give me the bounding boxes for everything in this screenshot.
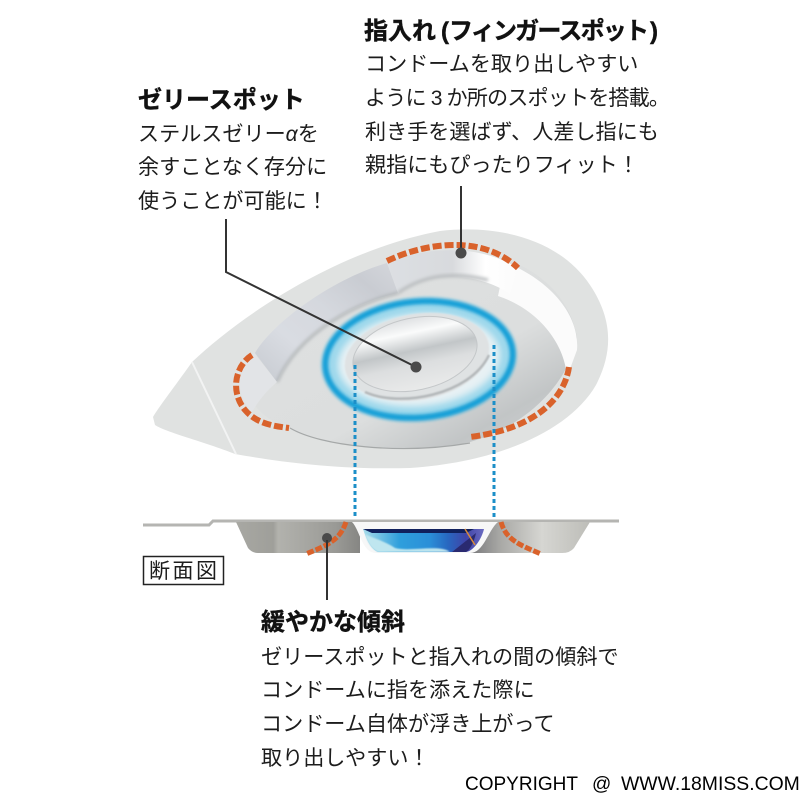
orange dashed: right slope: [501, 522, 541, 554]
leader line: gentle slope: [322, 533, 332, 600]
orange dashed: top finger spot: [387, 245, 518, 268]
text: finger spot description: ように 3 か所のスポットを搭載。: [365, 86, 670, 110]
dotted guide lines: [355, 345, 494, 518]
heading: jelly spot: [138, 86, 328, 213]
jelly cup: [346, 306, 484, 402]
pale lower left: [365, 534, 450, 552]
blue jelly cavity: [363, 529, 484, 552]
text: jelly spot description: 使うことが可能に！: [138, 189, 328, 213]
text: gentle slope description: 取り出しやすい！: [261, 746, 430, 770]
heading: finger spot: 指入れ: [364, 18, 436, 45]
text: jelly spot description: 余すことなく存分に: [138, 155, 327, 179]
heading: finger spot: ): [650, 18, 658, 45]
diagram: cross section: [143, 521, 619, 554]
text: finger spot description: 利き手を選ばず、人差し指にも: [365, 120, 659, 144]
tray body right: [470, 522, 590, 553]
heading: gentle slope: 緩やかな傾斜: [261, 609, 405, 636]
groove right band: [498, 262, 577, 377]
text: gentle slope description: コンドーム自体が浮き上がって: [261, 712, 555, 736]
orange dashed: right finger spot: [470, 367, 569, 437]
top spot lower shadow: [398, 276, 488, 293]
text: gentle slope description: コンドームに指を添えた際に: [261, 678, 535, 702]
tray lip: [143, 521, 619, 525]
groove top finger spot: [387, 250, 518, 294]
groove upper left band: [255, 263, 398, 382]
copyright: WWW.18MISS.COM: [621, 773, 800, 795]
thin bottom edge: [290, 428, 470, 448]
inner platform soft: [322, 295, 516, 423]
platform lower rim: [365, 355, 489, 399]
navy top strip: [363, 529, 474, 533]
text: gentle slope description: [261, 645, 619, 770]
orange reflection: [465, 529, 475, 545]
leader line: jelly spot: [226, 219, 422, 372]
diagram: top view of condom case: [153, 229, 608, 468]
text: gentle slope description: ゼリースポットと指入れの間の傾斜で: [261, 645, 619, 669]
tab crease: [192, 362, 236, 454]
text: finger spot description: 親指にもぴったりフィット！: [365, 153, 639, 177]
text: finger spot description: コンドームを取り出しやすい: [365, 52, 638, 76]
label: cross section: [144, 556, 224, 584]
leader line: finger spot: [456, 186, 466, 258]
copyright: COPYRIGHT: [465, 774, 578, 795]
heading: finger spot: [364, 18, 670, 177]
groove left spot: [240, 353, 277, 412]
label: cross section: 断面図: [149, 560, 217, 583]
text: jelly spot description: ステルスゼリーαを: [138, 122, 319, 146]
heading: gentle slope: [261, 609, 619, 770]
dark right corner: [452, 533, 476, 552]
groove band inner shadow: [277, 293, 398, 382]
floor shading: [247, 262, 577, 449]
center highlight: [352, 522, 498, 553]
blue ring: [320, 294, 518, 425]
heading: finger spot: (: [441, 18, 449, 45]
text: finger spot description: [365, 52, 670, 177]
copyright: @: [592, 774, 611, 795]
text: jelly spot description: [138, 122, 328, 213]
blue ring inner fade: [328, 301, 510, 419]
heading: finger spot: フィンガースポット: [449, 18, 649, 45]
heading: jelly spot: ゼリースポット: [138, 86, 305, 114]
orange dashed: left finger spot: [236, 355, 289, 428]
orange dashed: left slope: [306, 522, 346, 554]
outer tray shape: [153, 229, 608, 468]
tray body left: [236, 522, 360, 553]
inner platform: [338, 302, 496, 412]
